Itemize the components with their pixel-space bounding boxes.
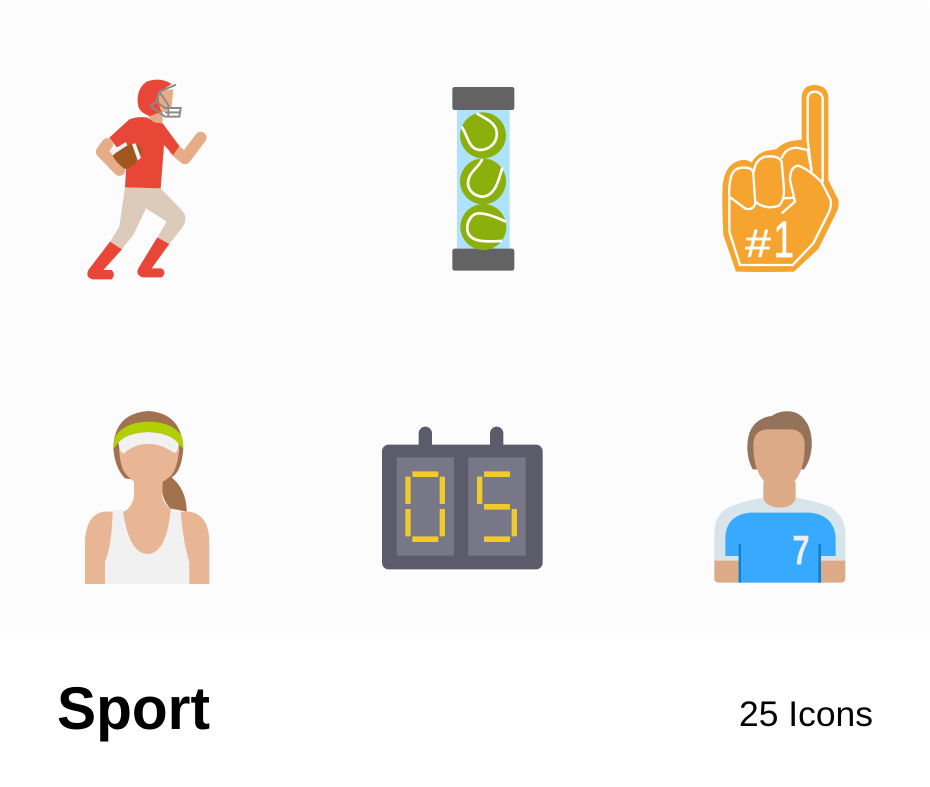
jersey number 7: 7: [792, 527, 810, 574]
label: #1: #: [745, 222, 771, 266]
icon count: 25 Icons: [739, 695, 873, 734]
icon: tennis ball tube: [452, 87, 514, 271]
title: Sport: [57, 675, 210, 742]
icon: scoreboard: [382, 427, 543, 569]
icon: foam finger: [722, 85, 839, 272]
icon: football player: [87, 80, 201, 279]
digit 0: [405, 471, 445, 542]
icon: woman with visor: [85, 411, 209, 584]
ball 2: [460, 158, 506, 204]
digit 5: [477, 471, 517, 542]
label: #1: 1: [773, 211, 794, 268]
ball 3: [460, 204, 506, 250]
icon: soccer player: [714, 411, 845, 583]
label: #1: [745, 211, 794, 268]
ball 1: [460, 112, 506, 158]
